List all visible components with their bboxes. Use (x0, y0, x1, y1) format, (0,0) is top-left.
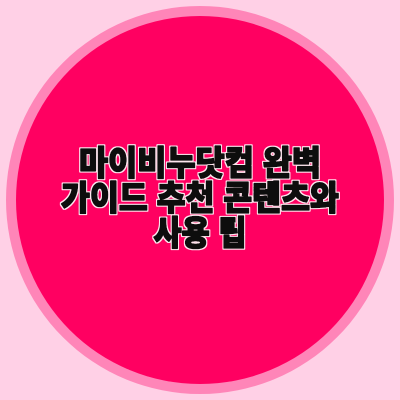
title: 사용 팁 (154, 215, 246, 253)
title: 가이드 추천 콘텐츠와 (61, 180, 339, 218)
title (61, 145, 339, 253)
title: 마이비누닷컴 완벽 (79, 145, 321, 183)
